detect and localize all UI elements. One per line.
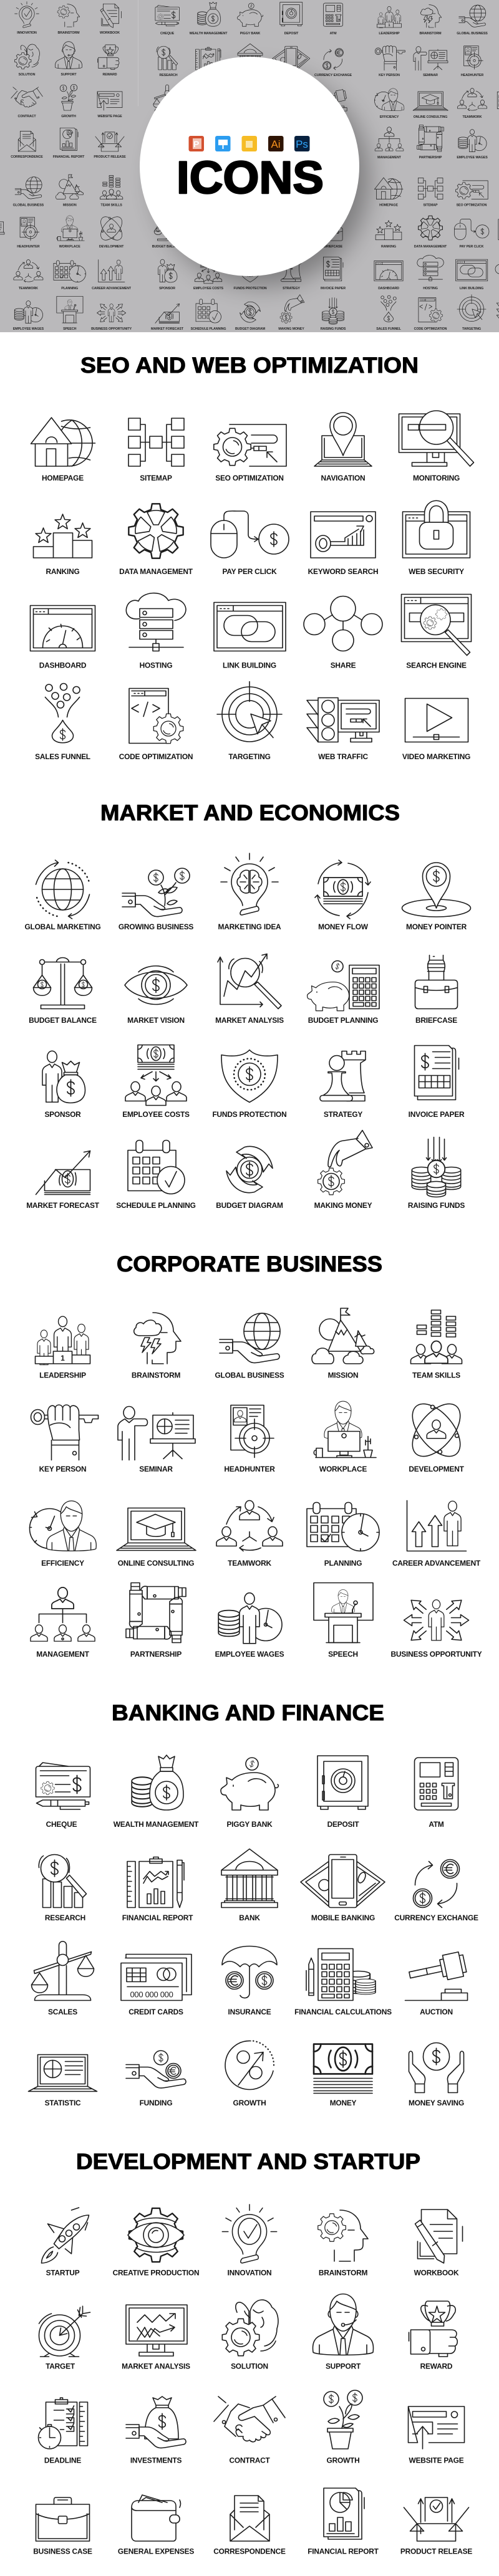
collage block: banking and finance, top centre bbox=[153, 2, 352, 111]
collage block: market and economics, lower centre: MARKET FORECAST bbox=[151, 327, 184, 331]
icon: key person bbox=[31, 1405, 99, 1460]
collage block: corporate business, top right: MANAGEMENT bbox=[377, 156, 402, 160]
label: creative production: CREATIVE PRODUCTION bbox=[113, 2269, 199, 2277]
collage block: market and economics, lower centre: MAKING MONEY bbox=[278, 327, 304, 331]
icon: deadline bbox=[39, 2398, 87, 2449]
label: market vision: MARKET VISION bbox=[127, 1016, 185, 1025]
icon: workbook bbox=[415, 2210, 463, 2263]
icon: product release bbox=[404, 2497, 469, 2541]
label: market analysis: MARKET ANALYSIS bbox=[215, 1016, 284, 1025]
label: schedule planning: SCHEDULE PLANNING bbox=[116, 1201, 196, 1210]
icon: correspondence bbox=[230, 2496, 269, 2541]
label: team skills: TEAM SKILLS bbox=[412, 1371, 460, 1380]
icon: innovation bbox=[222, 2205, 277, 2263]
label: deposit: DEPOSIT bbox=[327, 1820, 359, 1829]
icon: employee wages bbox=[218, 1593, 282, 1644]
label: support: SUPPORT bbox=[326, 2362, 361, 2371]
icon: navigation bbox=[314, 413, 372, 466]
icon: credit cards: 000 000 000 bbox=[130, 1989, 173, 1999]
icon: website page bbox=[408, 2406, 464, 2449]
label: funding: FUNDING bbox=[140, 2099, 172, 2107]
collage block: market and economics, lower centre: RAISING FUNDS bbox=[321, 327, 346, 331]
collage block: corporate business, lower left: TEAMWORK bbox=[19, 287, 38, 290]
collage block: corporate business, lower left: CAREER ADVANCEMENT bbox=[92, 287, 132, 290]
collage block: corporate business, lower left: BUSINESS OPPORTUNITY bbox=[91, 327, 132, 331]
label: development: DEVELOPMENT bbox=[409, 1465, 465, 1473]
icon: sponsor bbox=[42, 1051, 85, 1103]
collage block: seo and web, lower right: TARGETING bbox=[462, 327, 481, 331]
collage block: development and startup bbox=[0, 2, 126, 159]
label: funds protection: FUNDS PROTECTION bbox=[212, 1110, 287, 1119]
icon: targeting bbox=[217, 682, 282, 742]
icon: briefcase bbox=[415, 955, 458, 1008]
collage block: market and economics, lower centre: BUDGET BALANCE bbox=[152, 245, 183, 249]
icon: team skills bbox=[410, 1310, 462, 1364]
label: currency exchange: CURRENCY EXCHANGE bbox=[394, 1913, 478, 1922]
icon: insurance bbox=[222, 1946, 277, 1998]
collage block: seo and web, lower right bbox=[374, 178, 499, 331]
icon: piggy bank bbox=[221, 1758, 278, 1810]
label: budget planning: BUDGET PLANNING bbox=[308, 1016, 378, 1025]
icon: invoice paper bbox=[414, 1046, 459, 1099]
collage block: seo and web, lower right: CODE OPTIMIZATION bbox=[414, 327, 447, 331]
icon: link building bbox=[214, 602, 286, 651]
label: sales funnel: SALES FUNNEL bbox=[35, 752, 90, 761]
collage block: seo and web, lower right: SITEMAP bbox=[424, 203, 438, 207]
heading: development and startup: DEVELOPMENT AND STARTUP bbox=[76, 2150, 420, 2174]
label: financial report: FINANCIAL REPORT bbox=[122, 1913, 193, 1922]
collage block: corporate business, top right: EFFICIENCY bbox=[380, 115, 399, 119]
label: research: RESEARCH bbox=[45, 1913, 85, 1922]
icon: pay per click bbox=[211, 511, 289, 558]
label: video marketing: VIDEO MARKETING bbox=[402, 752, 470, 761]
label: financial report: FINANCIAL REPORT bbox=[308, 2547, 379, 2555]
collage block: corporate business, top right: BRAINSTORM bbox=[420, 32, 442, 36]
collage block: seo and web, lower right: SEO OPTIMIZATION bbox=[457, 203, 487, 207]
icon: global marketing bbox=[36, 860, 90, 919]
collage block: corporate business, top right: ONLINE CONSULTING bbox=[414, 115, 447, 119]
label: growth: GROWTH bbox=[233, 2099, 266, 2107]
label: planning: PLANNING bbox=[324, 1559, 362, 1568]
label: workbook: WORKBOOK bbox=[414, 2269, 459, 2277]
icon: scales bbox=[31, 1942, 94, 2001]
icon: mobile banking bbox=[301, 1855, 385, 1907]
collage block: market and economics, lower centre: BRIEFCASE bbox=[324, 245, 342, 249]
label: invoice paper: INVOICE PAPER bbox=[409, 1110, 465, 1119]
label: search engine: SEARCH ENGINE bbox=[406, 661, 467, 669]
icon: auction bbox=[405, 1951, 468, 2001]
label: brainstorm: BRAINSTORM bbox=[132, 1371, 180, 1380]
label: website page: WEBSITE PAGE bbox=[409, 2456, 464, 2464]
label: key person: KEY PERSON bbox=[39, 1465, 86, 1473]
label: speech: SPEECH bbox=[328, 1650, 358, 1659]
label: pay per click: PAY PER CLICK bbox=[222, 567, 277, 576]
app badges row: P bbox=[193, 139, 199, 149]
collage block: development and startup: WEBSITE PAGE bbox=[97, 115, 122, 118]
icon: employee costs bbox=[125, 1045, 187, 1106]
header background collage bbox=[0, 0, 499, 332]
collage block: corporate business, top right: EMPLOYEE WAGES bbox=[457, 156, 488, 160]
icon: search engine bbox=[402, 595, 472, 656]
label: general expenses: GENERAL EXPENSES bbox=[118, 2547, 194, 2555]
icon: global business bbox=[220, 1313, 280, 1363]
icon: efficiency bbox=[30, 1501, 96, 1551]
icon: raising funds bbox=[412, 1137, 461, 1197]
icon: market vision bbox=[125, 966, 187, 1005]
label: dashboard: DASHBOARD bbox=[39, 661, 87, 669]
label: sitemap: SITEMAP bbox=[140, 474, 172, 482]
label: online consulting: ONLINE CONSULTING bbox=[118, 1559, 194, 1568]
icon: creative production bbox=[128, 2208, 184, 2262]
collage block: seo and web, lower right: LINK BUILDING bbox=[460, 287, 483, 290]
label: mission: MISSION bbox=[328, 1371, 358, 1380]
label: marketing idea: MARKETING IDEA bbox=[218, 922, 281, 931]
label: target: TARGET bbox=[46, 2362, 75, 2371]
icon: code optimization bbox=[129, 688, 183, 744]
collage block: market and economics, lower centre: SCHEDULE PLANNING bbox=[191, 327, 226, 331]
icon: startup bbox=[41, 2208, 89, 2263]
icon: headhunter bbox=[231, 1405, 274, 1457]
icon: money flow bbox=[315, 860, 371, 919]
icon: video marketing bbox=[405, 698, 468, 742]
label: money: MONEY bbox=[330, 2099, 357, 2107]
label: budget balance: BUDGET BALANCE bbox=[29, 1016, 97, 1025]
label: deadline: DEADLINE bbox=[44, 2456, 81, 2464]
collage block: corporate business, lower left: EMPLOYEE WAGES bbox=[13, 327, 44, 331]
label: seminar: SEMINAR bbox=[139, 1465, 173, 1473]
panel: market and economics bbox=[24, 801, 470, 1210]
label: money flow: MONEY FLOW bbox=[318, 922, 369, 931]
label: bank: BANK bbox=[239, 1913, 260, 1922]
label: teamwork: TEAMWORK bbox=[228, 1559, 271, 1568]
label: share: SHARE bbox=[331, 661, 356, 669]
collage block: corporate business, top right: KEY PERSON bbox=[379, 74, 400, 77]
collage block: corporate business, top right: SEMINAR bbox=[423, 74, 438, 77]
collage block: seo and web, lower right: DASHBOARD bbox=[378, 287, 399, 290]
label: employee wages: EMPLOYEE WAGES bbox=[215, 1650, 284, 1659]
label: making money: MAKING MONEY bbox=[314, 1201, 372, 1210]
label: efficiency: EFFICIENCY bbox=[41, 1559, 84, 1568]
icon: financial report bbox=[324, 2488, 364, 2539]
label: wealth management: WEALTH MANAGEMENT bbox=[114, 1820, 199, 1829]
label: credit cards: CREDIT CARDS bbox=[128, 2008, 183, 2016]
label: startup: STARTUP bbox=[46, 2269, 80, 2277]
collage block: development and startup: SOLUTION bbox=[19, 73, 36, 77]
hero circle bbox=[140, 57, 369, 286]
icon: dashboard bbox=[30, 606, 95, 651]
collage block: market and economics, lower centre: STRATEGY bbox=[283, 287, 300, 290]
collage block: corporate business, lower left: DEVELOPMENT bbox=[99, 245, 124, 249]
label: raising funds: RAISING FUNDS bbox=[408, 1201, 465, 1210]
label: employee costs: EMPLOYEE COSTS bbox=[122, 1110, 190, 1119]
icon: career advancement bbox=[407, 1501, 467, 1551]
label: correspondence: CORRESPONDENCE bbox=[213, 2547, 286, 2555]
collage block: seo and web, lower right: PAY PER CLICK bbox=[460, 245, 484, 249]
icon: homepage bbox=[31, 418, 95, 466]
collage block: corporate business, lower left: PLANNING bbox=[61, 287, 78, 290]
collage block: development and startup: PRODUCT RELEASE bbox=[94, 155, 126, 159]
label: product release: PRODUCT RELEASE bbox=[400, 2547, 472, 2555]
label: strategy: STRATEGY bbox=[324, 1110, 362, 1119]
collage block: banking and finance, top centre: PIGGY BANK bbox=[240, 32, 261, 36]
icon: cheque bbox=[36, 1763, 90, 1809]
label: data management: DATA MANAGEMENT bbox=[119, 567, 193, 576]
label: global business: GLOBAL BUSINESS bbox=[215, 1371, 284, 1380]
icon: deposit bbox=[317, 1756, 368, 1809]
collage block: market and economics, lower centre: BUDGET DIAGRAM bbox=[235, 327, 266, 331]
collage block: development and startup: BRAINSTORM bbox=[58, 31, 80, 35]
icon: target bbox=[39, 2306, 90, 2357]
icon: keyword search bbox=[311, 512, 375, 558]
collage block: corporate business, lower left: WORKPLACE bbox=[59, 245, 80, 249]
label: code optimization: CODE OPTIMIZATION bbox=[119, 752, 193, 761]
icon: teamwork bbox=[216, 1501, 283, 1551]
icon: growth bbox=[324, 2390, 362, 2449]
label: monitoring: MONITORING bbox=[413, 474, 460, 482]
icon: seminar bbox=[118, 1406, 195, 1460]
label: brainstorm: BRAINSTORM bbox=[319, 2269, 367, 2277]
label: global marketing: GLOBAL MARKETING bbox=[24, 922, 101, 931]
icon: mission bbox=[312, 1308, 374, 1364]
collage block: seo and web, lower right: RANKING bbox=[381, 245, 396, 249]
icon: wealth management bbox=[132, 1755, 183, 1810]
icon: business case bbox=[36, 2497, 90, 2541]
collage block: development and startup: GROWTH bbox=[61, 115, 76, 118]
label: atm: ATM bbox=[429, 1820, 444, 1829]
icon: brainstorm bbox=[134, 1313, 181, 1364]
label: homepage: HOMEPAGE bbox=[42, 474, 84, 482]
icon: financial calculations bbox=[306, 1948, 375, 2001]
icon: investments bbox=[126, 2396, 186, 2448]
label: market forecast: MARKET FORECAST bbox=[26, 1201, 100, 1210]
app badges row: Ai bbox=[271, 138, 281, 150]
label: market analysis: MARKET ANALYSIS bbox=[122, 2362, 190, 2371]
collage block: corporate business, lower left bbox=[0, 175, 132, 331]
collage block: corporate business, top right: PARTNERSHIP bbox=[419, 156, 442, 160]
label: investments: INVESTMENTS bbox=[130, 2456, 182, 2464]
icon: monitoring bbox=[399, 411, 474, 466]
label: money pointer: MONEY POINTER bbox=[406, 922, 467, 931]
label: growth: GROWTH bbox=[327, 2456, 359, 2464]
label: briefcase: BRIEFCASE bbox=[415, 1016, 457, 1025]
panel: corporate business bbox=[30, 1252, 482, 1659]
collage block: corporate business, lower left: GLOBAL BUSINESS bbox=[13, 203, 44, 207]
collage block: banking and finance, top centre: RESEARCH bbox=[159, 74, 178, 77]
label: auction: AUCTION bbox=[420, 2008, 453, 2016]
label: business case: BUSINESS CASE bbox=[33, 2547, 92, 2555]
collage block: market and economics, lower centre bbox=[151, 217, 346, 331]
collage block: banking and finance, top centre: CHEQUE bbox=[160, 32, 175, 36]
collage block: corporate business, top right bbox=[374, 5, 499, 160]
collage block: development and startup: WORKBOOK bbox=[100, 31, 120, 35]
collage block: corporate business, top right: GLOBAL BUSINESS bbox=[457, 32, 488, 36]
label: piggy bank: PIGGY BANK bbox=[226, 1820, 273, 1829]
ICONS wordmark: ICONS bbox=[177, 153, 324, 203]
icon: schedule planning bbox=[128, 1141, 185, 1194]
icon: hosting bbox=[126, 593, 186, 651]
label: headhunter: HEADHUNTER bbox=[224, 1465, 275, 1473]
label: sponsor: SPONSOR bbox=[44, 1110, 81, 1119]
collage block: development and startup: SUPPORT bbox=[61, 73, 77, 77]
icon: budget balance bbox=[34, 957, 92, 1008]
icon: bank bbox=[221, 1849, 278, 1907]
icon: making money bbox=[318, 1131, 372, 1195]
collage block: development and startup: REWARD bbox=[102, 73, 117, 77]
label: management: MANAGEMENT bbox=[36, 1650, 90, 1659]
collage block: banking and finance, top centre: CURRENCY EXCHANGE bbox=[314, 74, 352, 77]
heading: SEO and web optimization: SEO AND WEB OPTIMIZATION bbox=[80, 353, 419, 378]
label: hosting: HOSTING bbox=[140, 661, 172, 669]
icon: research bbox=[39, 1855, 87, 1907]
icon: speech bbox=[314, 1583, 373, 1643]
collage block: banking and finance, top centre: DEPOSIT bbox=[284, 32, 299, 36]
collage block: market and economics, lower centre: FUNDS PROTECTION bbox=[233, 287, 267, 290]
icon: general expenses bbox=[132, 2495, 181, 2541]
icon: budget diagram bbox=[226, 1146, 273, 1193]
icon: solution bbox=[222, 2300, 278, 2356]
label: mobile banking: MOBILE BANKING bbox=[311, 1913, 375, 1922]
collage block: corporate business, lower left: TEAM SKILLS bbox=[100, 203, 122, 207]
icon: market forecast bbox=[36, 1151, 90, 1194]
icon: management bbox=[31, 1587, 95, 1641]
collage block: corporate business, lower left: MISSION bbox=[63, 203, 77, 207]
icon: share bbox=[304, 596, 382, 651]
collage block: banking and finance, top centre: ATM bbox=[330, 32, 337, 36]
collage block: development and startup: CONTRACT bbox=[17, 115, 36, 118]
heading: banking and finance: BANKING AND FINANCE bbox=[112, 1701, 384, 1725]
icon: money bbox=[314, 2044, 372, 2093]
collage block: seo and web, lower right: DATA MANAGEMENT bbox=[414, 245, 447, 249]
label: growing business: GROWING BUSINESS bbox=[119, 922, 193, 931]
icon: money saving bbox=[409, 2043, 464, 2093]
collage block: corporate business, top right: TEAMWORK bbox=[462, 115, 482, 119]
icon: planning bbox=[307, 1502, 379, 1551]
label: web security: WEB SECURITY bbox=[409, 567, 464, 576]
panel: SEO and web optimization bbox=[30, 353, 474, 761]
collage block: market and economics, lower centre: INVOICE PAPER bbox=[321, 287, 346, 290]
icon: development bbox=[404, 1396, 469, 1465]
label: web traffic: WEB TRAFFIC bbox=[318, 752, 368, 761]
icon: sales funnel bbox=[45, 683, 80, 743]
icon: growing business bbox=[122, 868, 190, 917]
collage block: corporate business, lower left: SPEECH bbox=[63, 327, 77, 331]
label: budget diagram: BUDGET DIAGRAM bbox=[216, 1201, 283, 1210]
icon: business opportunity bbox=[404, 1596, 469, 1645]
icon: web security bbox=[403, 500, 470, 558]
icon: marketing idea bbox=[221, 853, 278, 915]
collage block: seo and web, lower right: HOMEPAGE bbox=[379, 203, 398, 207]
icon: reward bbox=[409, 2301, 457, 2357]
icon: ranking bbox=[34, 514, 92, 558]
icon: online consulting bbox=[117, 1508, 196, 1551]
collage block: corporate business, top right: HEADHUNTER bbox=[461, 74, 483, 77]
collage block: seo and web, lower right: HOSTING bbox=[423, 287, 438, 290]
collage block: market and economics, lower centre: SPONSOR bbox=[159, 287, 175, 290]
label: insurance: INSURANCE bbox=[228, 2008, 271, 2016]
label: workplace: WORKPLACE bbox=[319, 1465, 367, 1473]
collage block: development and startup: CORRESPONDENCE bbox=[11, 155, 43, 159]
label: business opportunity: BUSINESS OPPORTUNITY bbox=[391, 1650, 482, 1659]
icon: sitemap bbox=[128, 418, 184, 466]
collage block: development and startup: FINANCIAL REPORT bbox=[53, 155, 85, 159]
icon: contract bbox=[214, 2396, 285, 2442]
panel: banking and finance bbox=[29, 1701, 478, 2107]
label: navigation: NAVIGATION bbox=[321, 474, 365, 482]
collage block: seo and web, lower right: SALES FUNNEL bbox=[376, 327, 402, 331]
icon: funds protection bbox=[221, 1050, 278, 1102]
label: innovation: INNOVATION bbox=[228, 2269, 271, 2277]
icon: market analysis bbox=[218, 954, 281, 1008]
icon: currency exchange bbox=[413, 1860, 459, 1907]
icon: money pointer bbox=[402, 863, 470, 917]
icon: strategy bbox=[320, 1051, 366, 1101]
heading: market and economics: MARKET AND ECONOMICS bbox=[100, 801, 400, 825]
icon: support bbox=[312, 2294, 374, 2355]
label: partnership: PARTNERSHIP bbox=[130, 1650, 182, 1659]
icon: web traffic bbox=[307, 698, 379, 742]
label: cheque: CHEQUE bbox=[46, 1820, 77, 1829]
app badges row: Ps bbox=[296, 138, 308, 150]
label: scales: SCALES bbox=[48, 2008, 77, 2016]
icon: leadership: 1 bbox=[61, 1354, 65, 1362]
label: keyword search: KEYWORD SEARCH bbox=[308, 567, 378, 576]
heading: corporate business: CORPORATE BUSINESS bbox=[117, 1252, 382, 1276]
icon: partnership bbox=[126, 1583, 186, 1643]
icon: seo optimization bbox=[214, 424, 286, 466]
label: leadership: LEADERSHIP bbox=[39, 1371, 86, 1380]
icon: budget planning bbox=[308, 961, 379, 1011]
label: seo optimization: SEO OPTIMIZATION bbox=[215, 474, 284, 482]
icon: growth bbox=[225, 2041, 274, 2089]
collage block: development and startup: INNOVATION bbox=[17, 31, 37, 35]
icon: market analysis bbox=[126, 2305, 187, 2356]
label: statistic: STATISTIC bbox=[45, 2099, 81, 2107]
label: money saving: MONEY SAVING bbox=[409, 2099, 464, 2107]
icon: credit cards bbox=[121, 1955, 191, 2001]
icon: statistic bbox=[29, 2054, 97, 2092]
collage block: banking and finance, top centre: WEALTH MANAGEMENT bbox=[190, 32, 228, 36]
label: link building: LINK BUILDING bbox=[223, 661, 276, 669]
label: financial calculations: FINANCIAL CALCULATIONS bbox=[294, 2008, 392, 2016]
label: reward: REWARD bbox=[420, 2362, 453, 2371]
collage block: market and economics, lower centre: EMPLOYEE COSTS bbox=[193, 287, 223, 290]
label: targeting: TARGETING bbox=[228, 752, 271, 761]
label: career advancement: CAREER ADVANCEMENT bbox=[392, 1559, 481, 1568]
icon: funding bbox=[126, 2051, 186, 2088]
icon: workplace bbox=[314, 1401, 376, 1457]
label: contract: CONTRACT bbox=[229, 2456, 270, 2464]
collage block: corporate business, top right: LEADERSHIP bbox=[379, 32, 400, 36]
icon: brainstorm bbox=[318, 2210, 368, 2261]
panel: development and startup bbox=[33, 2150, 472, 2555]
icon: data management bbox=[128, 504, 183, 558]
label: solution: SOLUTION bbox=[231, 2362, 268, 2371]
icon: leadership bbox=[35, 1316, 90, 1365]
icon: financial report bbox=[127, 1857, 184, 1907]
label: ranking: RANKING bbox=[46, 567, 80, 576]
icon: atm bbox=[414, 1758, 458, 1810]
app badges row bbox=[188, 136, 309, 151]
collage block: corporate business, lower left: HEADHUNTER bbox=[17, 245, 40, 249]
